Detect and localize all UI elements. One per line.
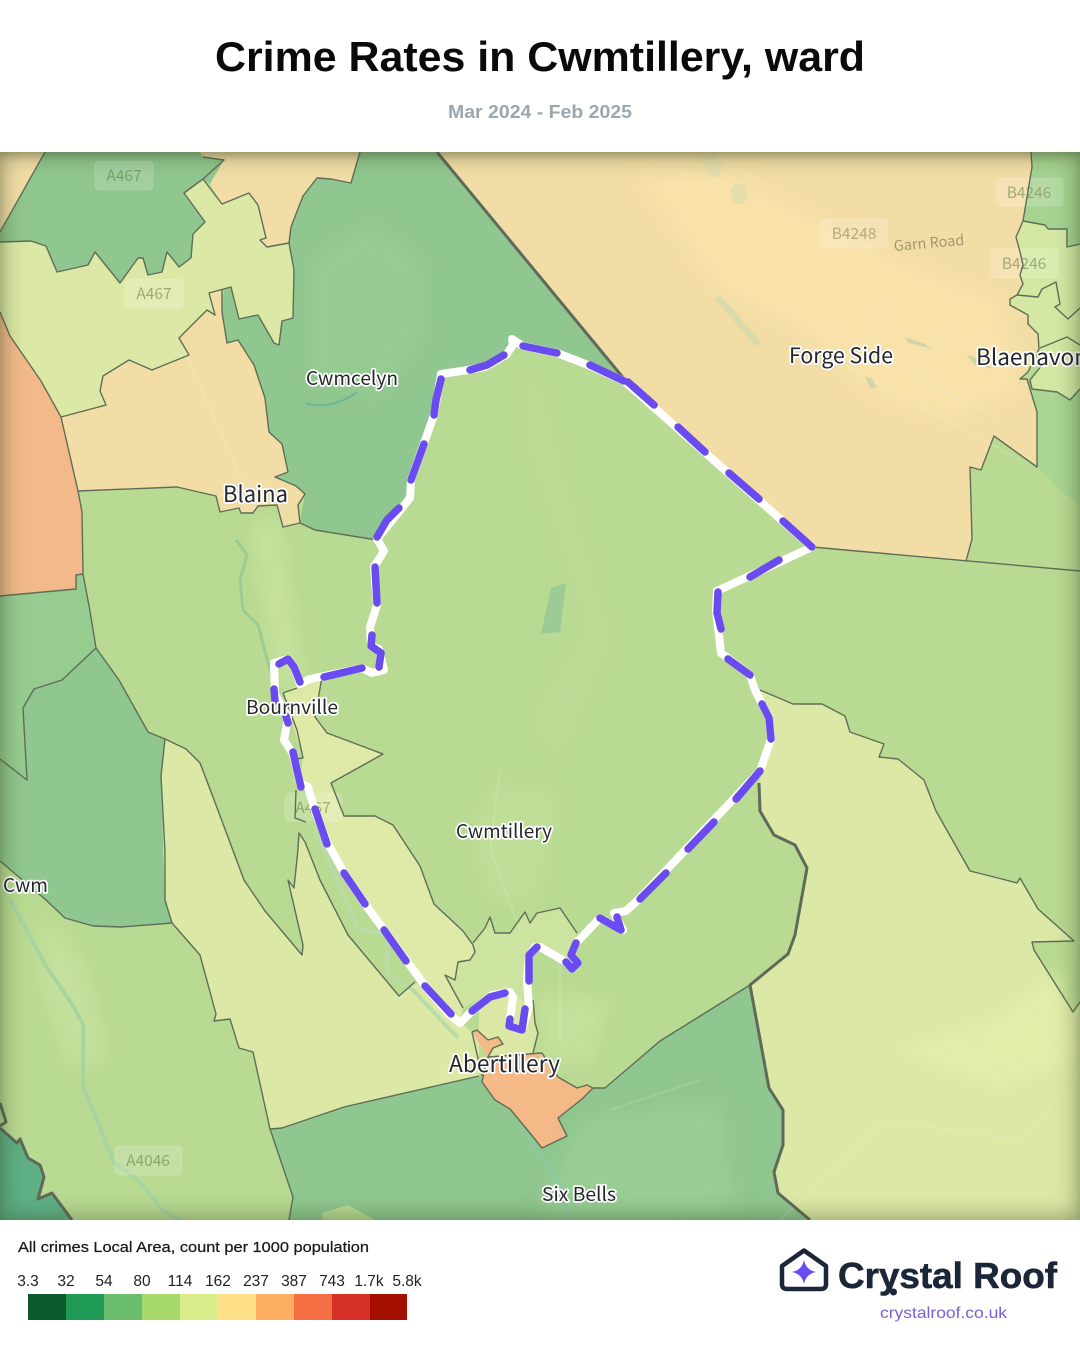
road label: A4046: [115, 1146, 182, 1175]
area: south-west darkest green: [0, 1128, 72, 1220]
icon: house with star: [782, 1250, 826, 1289]
legend colour scale: [28, 1294, 407, 1320]
legend values: 32: [57, 1273, 75, 1290]
road label: B4248: B4248: [832, 222, 876, 244]
area boundary lines: [0, 152, 1080, 1220]
road label: B4248: [820, 219, 888, 248]
area: Cwm dark green: [0, 648, 172, 927]
road label: B4246 north: B4246: [1007, 181, 1051, 203]
place label: Cwm: Cwm: [3, 871, 48, 898]
road label: A467 north: [95, 161, 153, 190]
place label: Forge Side: Forge Side: [789, 340, 893, 370]
road label: A467: A467: [136, 282, 172, 304]
legend values: 3.3: [17, 1273, 39, 1290]
legend values: 162: [205, 1273, 231, 1290]
place label: Cwmcelyn: Cwmcelyn: [306, 364, 398, 391]
area: west medium green: [0, 574, 96, 780]
road label: A467 south: A467: [295, 796, 331, 818]
area: Blaina tan: [61, 290, 305, 527]
road label: Garn Road: Garn Road: [893, 229, 965, 256]
road label: B4246 south: [991, 249, 1058, 278]
road label: B4246 south: B4246: [1002, 252, 1046, 274]
area: Abertillery town tint: [445, 908, 577, 1008]
legend values: 54: [95, 1273, 113, 1290]
road label: A467 south: [285, 793, 342, 821]
legend values: 387: [281, 1273, 307, 1290]
place label: Six Bells: Six Bells: [542, 1180, 616, 1207]
area: Forge Side tan: [437, 152, 1039, 561]
legend values: 5.8k: [392, 1273, 422, 1290]
legend: [17, 1239, 422, 1320]
area: southern valley yellow-green: [161, 739, 538, 1129]
area: north-east green: [1023, 152, 1080, 247]
area: top-left tan corner: [0, 152, 45, 232]
area: Bournville valley strip: [283, 677, 475, 1022]
area: east yellow-green: [750, 690, 1080, 1220]
place label: Cwmtillery: Cwmtillery: [456, 817, 552, 844]
area: upper tan: [200, 152, 360, 247]
area: Abertillery orange: [472, 1030, 593, 1148]
area: Blaenavon east green: [1027, 360, 1080, 505]
ward boundary purple dashes: [274, 346, 812, 1030]
title: Crime Rates in Cwmtillery, ward: [215, 33, 865, 80]
ward boundary white base: [274, 339, 812, 1030]
legend values: 114: [168, 1273, 193, 1290]
place label: Blaina: Blaina: [223, 477, 288, 509]
header: [215, 33, 865, 122]
map base: light green areas: [0, 152, 1080, 1220]
area: small south patch: [322, 1205, 375, 1220]
legend values: 80: [133, 1273, 151, 1290]
ward boundary: Cwmtillery: [274, 339, 812, 1030]
legend values: [17, 1273, 422, 1290]
wordmark: Crystal Roof: [838, 1255, 1058, 1296]
legend title: All crimes Local Area, count per 1000 population: [18, 1239, 369, 1256]
legend values: 237: [243, 1273, 269, 1290]
area: south medium green: [270, 985, 810, 1220]
subtitle: Mar 2024 - Feb 2025: [448, 101, 632, 122]
area: top-left dark green: [0, 152, 224, 283]
area: north-west yellow-green: [0, 179, 294, 417]
terrain detail: [10, 154, 1075, 1220]
area: west orange: [0, 312, 83, 596]
website: crystalroof.co.uk: [880, 1305, 1008, 1322]
legend values: 743: [319, 1273, 345, 1290]
map: [0, 152, 1080, 1220]
place label: Abertillery: Abertillery: [449, 1045, 560, 1079]
area: Blaenavon yellow-green: [1010, 221, 1080, 400]
legend values: 1.7k: [354, 1273, 384, 1290]
area: Cwmcelyn green: [222, 152, 625, 540]
road label: B4246 north: [996, 178, 1063, 206]
road label: A4046: A4046: [126, 1149, 170, 1171]
logo: Crystal Roof: [780, 1248, 1058, 1322]
road label: A467 north: A467: [106, 164, 142, 186]
place label: Bournville: Bournville: [246, 693, 338, 720]
road label: A467: [125, 279, 183, 308]
